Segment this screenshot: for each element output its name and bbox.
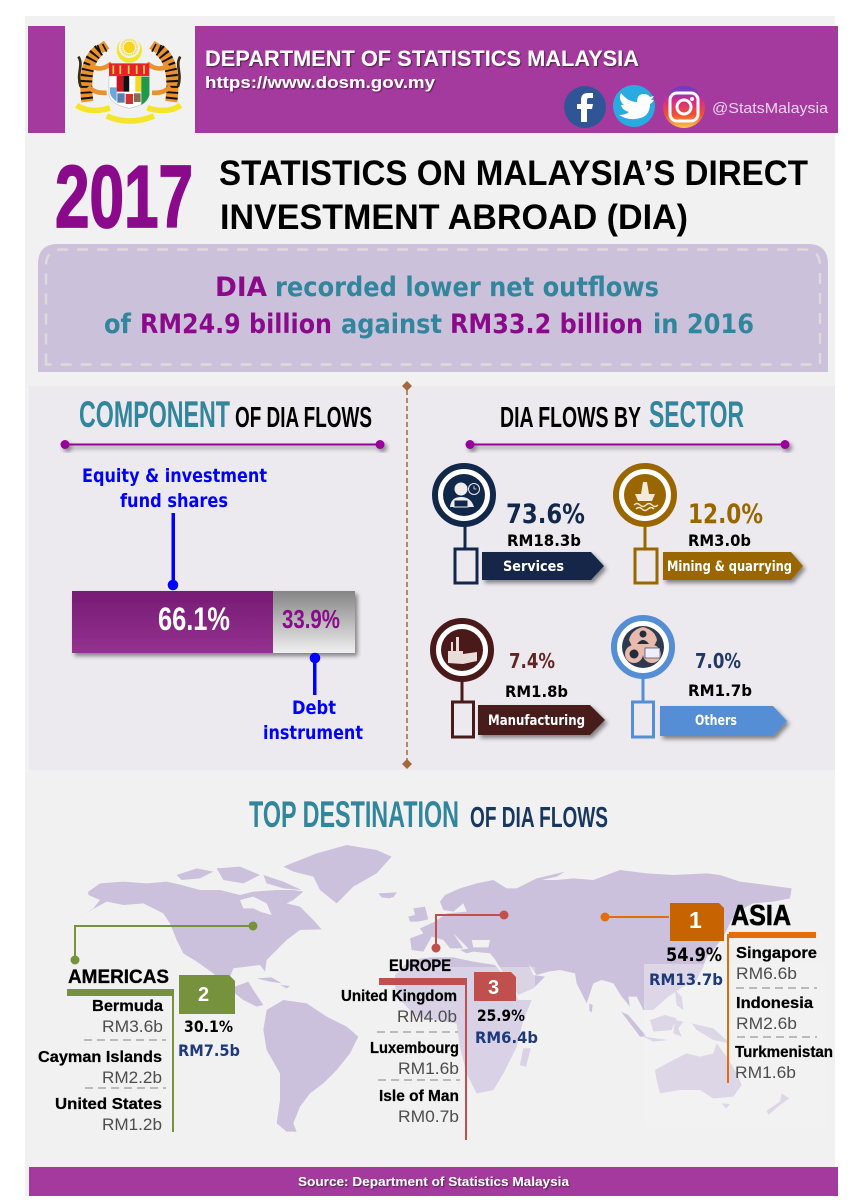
country list: RM1.2b xyxy=(102,1115,162,1134)
percentage: 7.4% xyxy=(509,649,555,673)
callout: headline finding: DIA xyxy=(215,272,267,303)
connector xyxy=(600,912,669,922)
region: europe xyxy=(341,910,538,1140)
website url: https://www.dosm.gov.my xyxy=(205,73,436,92)
value: RM1.7b xyxy=(688,681,752,700)
country list: RM2.6b xyxy=(736,1014,797,1033)
rank badge: 1 xyxy=(689,907,702,933)
heading: sector xyxy=(500,394,744,435)
world map xyxy=(75,845,792,1132)
icon: facebook xyxy=(564,86,606,128)
percentage: 12.0% xyxy=(688,499,763,530)
icon: instagram xyxy=(663,86,705,128)
panel divider xyxy=(402,381,412,769)
share: 54.9% xyxy=(666,944,722,966)
panel: component of DIA flows xyxy=(60,394,384,744)
footer: source xyxy=(29,1167,838,1196)
list backdrop: europe xyxy=(370,967,535,1123)
percentage: 7.0% xyxy=(695,649,741,673)
sector: manufacturing xyxy=(433,621,605,737)
country list: RM3.6b xyxy=(102,1017,163,1036)
label arrow: Others xyxy=(695,713,737,729)
connector xyxy=(432,910,508,952)
callout: headline finding: in 2016 xyxy=(653,309,754,340)
region: asia xyxy=(600,900,833,1083)
organisation name: DEPARTMENT OF STATISTICS MALAYSIA xyxy=(205,46,639,71)
label arrow: Manufacturing xyxy=(488,713,585,729)
country list: RM1.6b xyxy=(398,1059,459,1078)
rank badge: 2 xyxy=(198,984,209,1006)
map: africa under europe list xyxy=(395,957,532,1093)
sector: others xyxy=(614,618,787,737)
icon: manufacturing xyxy=(433,621,491,737)
percentage: 73.6% xyxy=(506,499,585,530)
social handle: @StatsMalaysia xyxy=(712,100,829,117)
label arrow xyxy=(660,706,787,736)
label arrow: Services xyxy=(503,559,564,575)
panel: DIA flows background xyxy=(29,386,835,770)
country list xyxy=(735,945,833,1082)
label: equity: Equity & investment xyxy=(82,465,267,487)
heading: component: COMPONENT xyxy=(79,394,230,435)
country list: RM4.0b xyxy=(397,1007,457,1026)
country list xyxy=(341,988,460,1126)
list backdrop: asia xyxy=(644,964,826,1127)
country list: United Kingdom xyxy=(341,988,457,1005)
heading rule xyxy=(466,440,790,449)
rank badge xyxy=(670,903,724,941)
icon: others xyxy=(614,618,672,737)
country list: Luxembourg xyxy=(370,1040,459,1057)
footer: source: Source: Department of Statistics Malaysia xyxy=(298,1174,570,1189)
amount: RM6.4b xyxy=(475,1028,538,1047)
callout: headline finding: RM33.2 billion xyxy=(450,309,643,340)
label: debt: instrument xyxy=(263,722,363,744)
country list: Isle of Man xyxy=(379,1088,459,1105)
value: RM18.3b xyxy=(507,531,581,550)
stacked bar chart: 66.1% xyxy=(158,601,230,637)
callout: headline finding xyxy=(38,244,828,372)
label arrow xyxy=(478,705,605,735)
rank badge xyxy=(474,972,516,1001)
country list: United States xyxy=(55,1096,162,1113)
label: equity xyxy=(82,465,267,512)
label arrow xyxy=(663,552,803,580)
stacked bar chart: 33.9% xyxy=(282,604,340,634)
country list xyxy=(38,998,166,1134)
europe asia and africa xyxy=(379,870,792,1093)
pointer: debt xyxy=(310,653,320,695)
icon: twitter xyxy=(613,85,655,127)
heading: sector: SECTOR xyxy=(649,394,744,435)
label arrow xyxy=(482,552,604,580)
region name: ASIA xyxy=(731,900,791,932)
region name: AMERICAS xyxy=(68,967,169,988)
callout: headline finding: RM24.9 billion xyxy=(140,309,332,340)
region rule xyxy=(379,978,467,1140)
country list: Cayman Islands xyxy=(38,1049,162,1066)
sector: services xyxy=(435,466,604,583)
icon: mining xyxy=(616,466,674,583)
region: americas xyxy=(38,922,258,1134)
heading: component: OF DIA FLOWS xyxy=(235,402,372,434)
amount: RM7.5b xyxy=(178,1041,240,1060)
share: 30.1% xyxy=(184,1017,233,1036)
pointer: equity xyxy=(168,513,178,590)
oceania and maritime asia xyxy=(621,990,789,1115)
amount: RM13.7b xyxy=(649,970,723,989)
country list: Turkmenistan xyxy=(735,1044,833,1061)
panel: DIA flows by sector xyxy=(433,394,803,737)
rank badge: 3 xyxy=(488,977,499,999)
country list: RM0.7b xyxy=(398,1107,459,1126)
value: RM3.0b xyxy=(688,531,751,550)
sector: mining xyxy=(616,466,803,583)
callout: headline finding: of xyxy=(104,309,131,340)
country list: Indonesia xyxy=(736,995,813,1012)
header banner xyxy=(28,26,838,133)
callout: headline finding: against xyxy=(341,309,442,340)
heading: top destination: TOP DESTINATION xyxy=(249,794,459,835)
country list: RM1.6b xyxy=(735,1063,796,1082)
country list: Bermuda xyxy=(92,998,163,1015)
share: 25.9% xyxy=(477,1006,525,1025)
callout: headline finding: recorded lower net outflows xyxy=(275,272,659,303)
year: 2017 xyxy=(55,147,193,246)
rank badge xyxy=(179,975,235,1014)
country list: RM2.2b xyxy=(102,1068,162,1087)
label arrow: Mining & quarrying xyxy=(667,559,792,575)
region name: EUROPE xyxy=(389,956,451,975)
title: STATISTICS ON MALAYSIA’S DIRECT xyxy=(219,154,808,193)
icon: coat of arms of Malaysia xyxy=(77,37,181,121)
title: INVESTMENT ABROAD (DIA) xyxy=(220,198,688,237)
country list: RM6.6b xyxy=(736,964,797,983)
americas and greenland xyxy=(75,845,397,1132)
stacked bar chart xyxy=(72,591,355,653)
region rule xyxy=(727,932,816,1083)
label: debt xyxy=(263,697,363,744)
icon: services xyxy=(435,466,493,583)
region rule xyxy=(67,989,174,1132)
title xyxy=(219,154,808,237)
heading: sector: DIA FLOWS BY xyxy=(500,402,641,434)
label: equity: fund shares xyxy=(120,490,228,512)
label: debt: Debt xyxy=(292,697,336,719)
heading rule xyxy=(60,440,384,449)
country list: Singapore xyxy=(736,945,817,962)
connector xyxy=(70,922,258,964)
heading: top destination: OF DIA FLOWS xyxy=(470,802,608,834)
value: RM1.8b xyxy=(505,682,568,701)
